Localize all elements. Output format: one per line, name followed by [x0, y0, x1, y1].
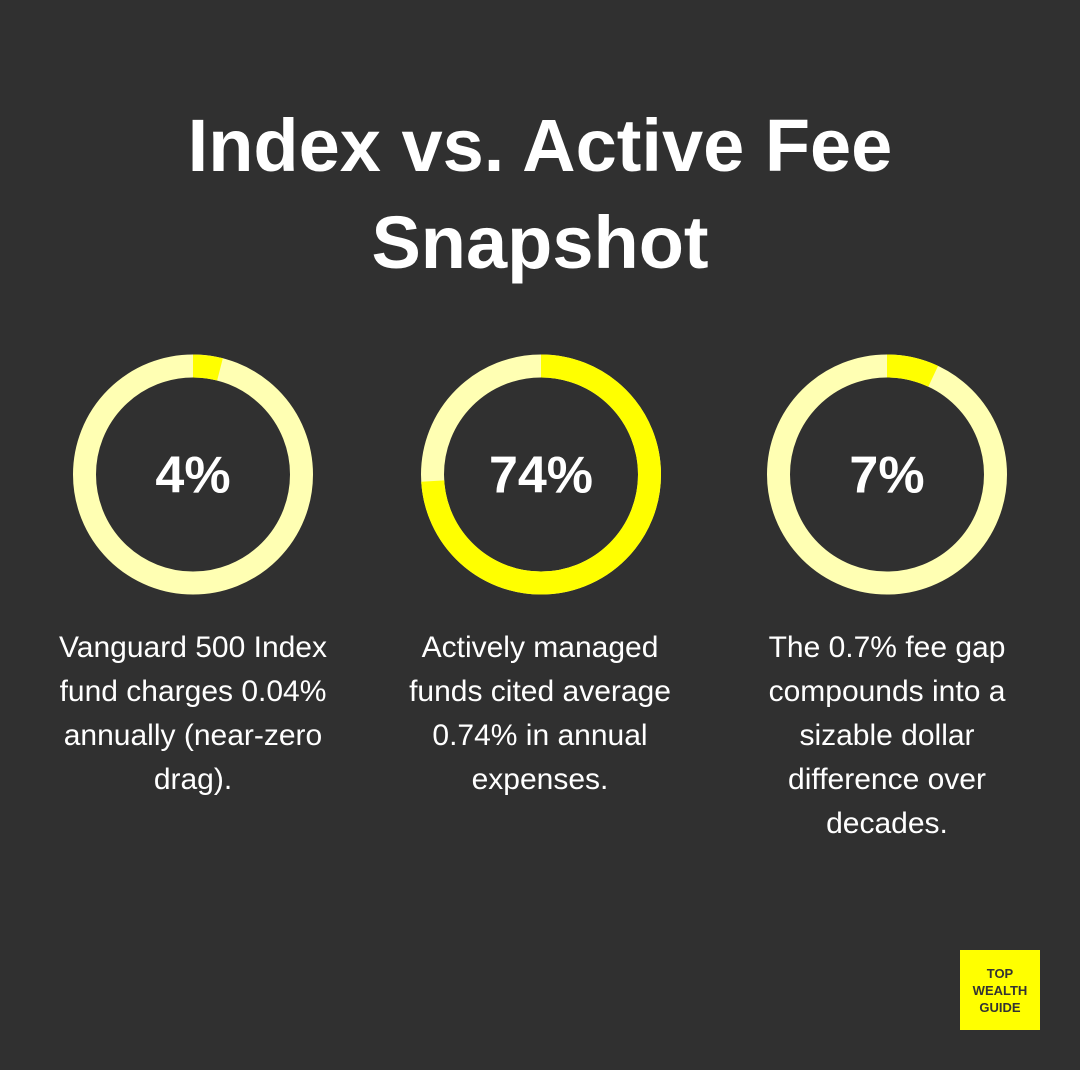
caption: index fund [59, 631, 327, 796]
caption: active funds: 0.74% in annual [432, 719, 648, 752]
caption: active funds: expenses. [472, 763, 608, 796]
caption: fee gap: The 0.7% fee gap [769, 631, 1005, 664]
title: Index vs. Active Fee [188, 104, 892, 187]
caption: active funds [409, 631, 671, 796]
caption: fee gap [769, 631, 1006, 840]
donut: 74% [432, 366, 650, 583]
caption: fee gap: compounds into a [769, 675, 1005, 708]
caption: active funds: funds cited average [409, 675, 671, 708]
caption: index fund: drag). [154, 763, 232, 796]
donut: 74%: 74% [489, 446, 593, 504]
logo: GUIDE [979, 1000, 1021, 1014]
caption: active funds: Actively managed [422, 631, 658, 664]
title [188, 104, 892, 284]
donut: 7% [778, 366, 996, 583]
donut: 7%: 7% [849, 446, 925, 504]
logo: WEALTH [973, 982, 1027, 998]
title: Snapshot [371, 201, 709, 284]
caption: index fund: Vanguard 500 Index [59, 631, 327, 664]
logo [960, 950, 1040, 1030]
caption: fee gap: sizable dollar [799, 719, 975, 752]
donut: 4% [84, 366, 302, 583]
caption: index fund: fund charges 0.04% [60, 675, 326, 708]
donut: 4%: 4% [155, 446, 231, 504]
logo: TOP [987, 966, 1013, 980]
caption: fee gap: decades. [826, 807, 948, 840]
caption: fee gap: difference over [788, 763, 986, 796]
caption: index fund: annually (near-zero [64, 719, 322, 752]
